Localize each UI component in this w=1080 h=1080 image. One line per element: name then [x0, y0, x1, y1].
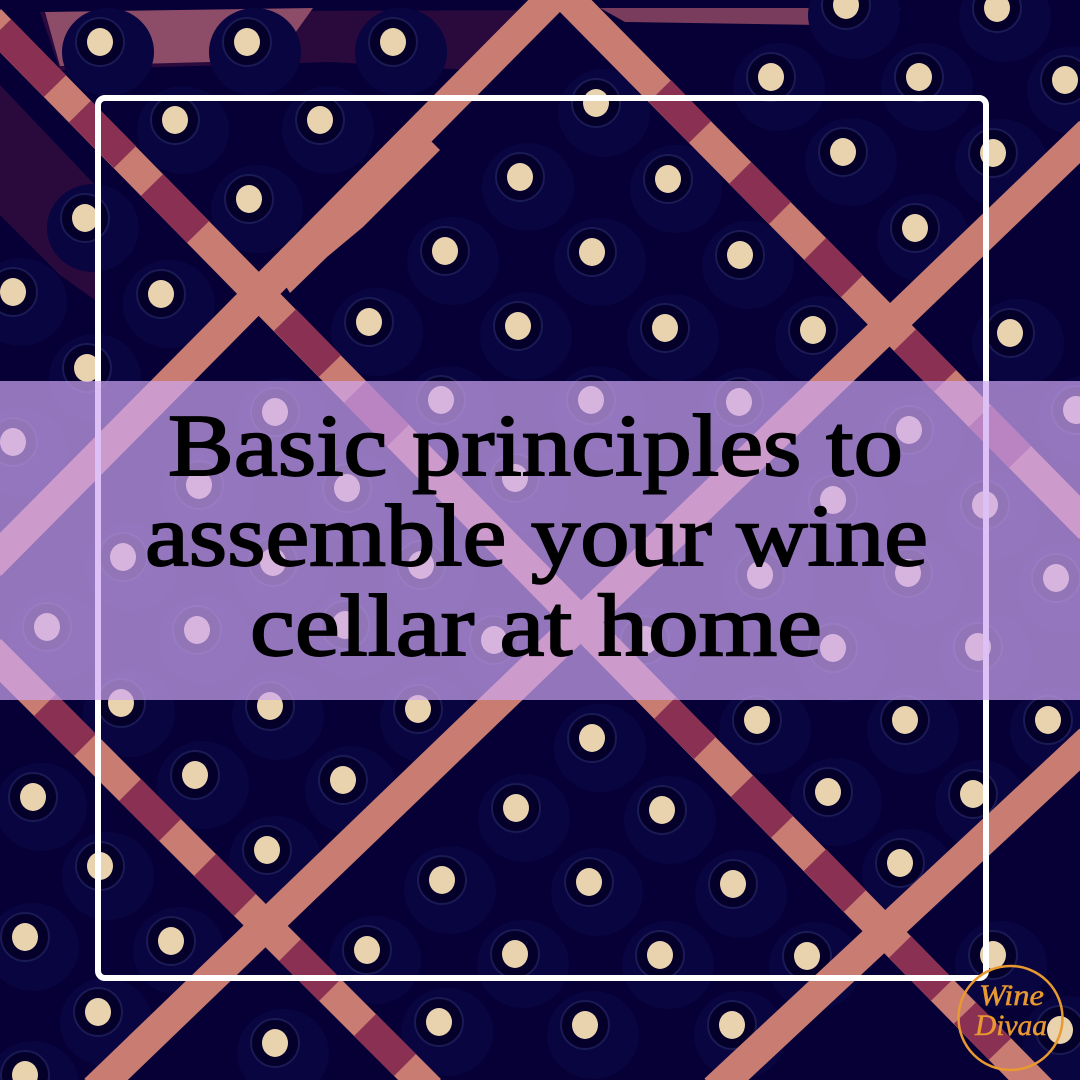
logo: Wine Divaa — [958, 966, 1062, 1070]
rear shelf: top left — [45, 8, 313, 66]
purple title band — [0, 381, 1080, 700]
title: cellar at home — [250, 578, 822, 675]
title — [145, 398, 928, 675]
white frame — [98, 98, 986, 978]
dark plum recess at left — [0, 85, 95, 300]
title: Basic principles to — [168, 398, 903, 495]
sunlit strip below upper beam — [285, 140, 440, 293]
logo: Wine Divaa: Wine — [979, 979, 1044, 1012]
title: assemble your wine — [145, 488, 928, 585]
logo: Wine Divaa: Divaa — [974, 1009, 1047, 1042]
rear wall plum at top — [40, 10, 560, 70]
rear shelf: top right — [600, 8, 900, 26]
